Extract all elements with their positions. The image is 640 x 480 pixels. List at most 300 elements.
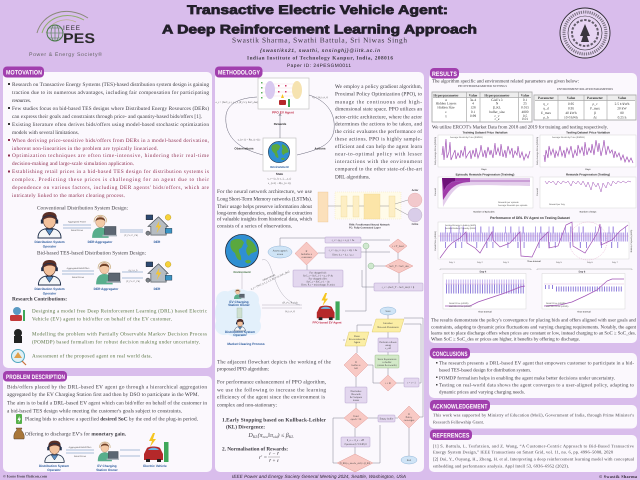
chart: training price: Average Electricity Price ($/MWh) — [450, 136, 483, 139]
text: results discussion: constraints, adapting to dynamic price fluctuations and varying charging requirements. Notably, the agent — [431, 324, 637, 330]
cloud: market clearing — [215, 289, 261, 337]
bullet list: conclusions: based TES-based design for distribution system. — [439, 367, 531, 373]
chart: day 6: Day 6 — [579, 270, 586, 274]
text: LSTM description: For the neural network architecture, we use — [217, 189, 313, 195]
box: SoC update: For charged offer: — [309, 278, 328, 280]
text: PPO description: near-to-optimal policy with lesser — [335, 152, 422, 158]
bullet list: motivation: complex. Predicting these prices is challenging for an agent due to their — [12, 177, 209, 183]
heading: research contributions: Research Contributions: — [12, 296, 67, 302]
text: references: Energy System Design,” IEEE Transactions on Smart Grid, vol. 11, no. 6, pp. 4996–5008, 2020 — [433, 449, 613, 454]
bullet list: motivation: intricately linked to the market clearing process. — [12, 193, 125, 199]
observations formula: o_t = {SoC_t, t_i, t_f, (P_t^c), SoC_des} — [250, 270, 291, 291]
end: End — [407, 459, 412, 462]
bullet list: conclusions: Testing on real-world data shows the agent converges to a user-aligned policy, adapting to — [439, 382, 635, 388]
update networks: Optimize (L^CLIP) θ — [344, 443, 367, 446]
table: environment: ρ_c — [592, 102, 598, 106]
table: hyperparameters: γ — [445, 114, 447, 118]
title: Transactive Electric Vehicle Agent: — [187, 3, 448, 17]
panel: methodology — [215, 66, 424, 472]
text: early stopping: 1.Early Stopping based on Kullback-Leibler — [222, 418, 327, 424]
table: hyperparameters: Value — [469, 93, 478, 97]
heading: motivation — [3, 66, 44, 78]
action formula: a_t = (q_t, p_t) — [312, 96, 328, 99]
store experiences: in buffer — [383, 361, 392, 364]
label: rewards: Rewards — [274, 122, 287, 126]
text: PPO description: actor-critic architecture, where the actor — [335, 114, 422, 120]
table: environment: Parameter — [587, 96, 603, 100]
chart: performance on testing: Performance of DRL EV Agent on Testing Dataset — [490, 216, 571, 220]
chart: performance on testing: Day 6 — [587, 261, 593, 264]
text: normalisation: r − r̄ — [269, 451, 280, 457]
table: environment: 0.25 h — [618, 115, 627, 119]
diagram: hierarchy: Distribution System — [39, 464, 69, 468]
text: LSTM description: Their usage helps preserve information about — [217, 204, 313, 210]
diagram: hierarchy: Retail Prices — [74, 455, 87, 458]
KL check: D_KL(π_new‖π_old) ≥ β_KL — [340, 462, 371, 465]
done check: full — [354, 367, 358, 370]
text: performance enhancement — [217, 380, 326, 408]
text: references — [433, 443, 635, 468]
table: hyperparameters — [432, 92, 532, 122]
diagram: hierarchy: Electric Vehicle — [143, 464, 167, 468]
cloud: market clearing: Station Owner — [228, 303, 251, 307]
text: references: [2] Dai, Y., Ouyang, H., Zheng, H. et al. Interpreting a deep reinforcement learning model with conceptual — [433, 456, 635, 461]
table: environment: E_max — [541, 111, 551, 115]
bullet list: motivation — [8, 82, 210, 199]
text: PPO description: these actions. PPO is highly sample- — [335, 136, 422, 142]
normalize: Normalize — [351, 390, 362, 393]
goal: monetary gain: Offering to discharge EV's for monetary gain. — [25, 432, 127, 438]
panel: problem description — [3, 371, 212, 472]
chart: testing price — [536, 130, 636, 171]
text: early stopping: KL — [288, 434, 294, 439]
chart: episodic rewards: Reward — [434, 187, 437, 196]
text: acknowledgement: Research Fellowship Grant. — [433, 419, 484, 424]
diamond: desired SoC — [385, 259, 413, 273]
label: observations: Observations — [234, 146, 254, 150]
text: normalisation — [222, 446, 288, 464]
chart: episodic rewards: Number of Episodes — [473, 210, 495, 214]
caption: table 1: PPO HYPERPARAMETER SETTINGS — [458, 84, 507, 88]
bullet list: motivation: resources. — [12, 98, 31, 104]
time check — [380, 375, 396, 391]
logo: IEEE PES: IEEE — [63, 25, 81, 32]
bullet list: conclusions: POMDP formalism helps in enabling the agent make better decisions under uncertainty. — [439, 375, 615, 381]
panel: references — [429, 430, 637, 472]
box: SoC update: Here, P_t = min(charge, P_min) — [301, 284, 335, 286]
diagram: PPO agent loop — [216, 78, 334, 185]
observations formula: Observations — [262, 273, 276, 282]
converge check — [398, 406, 420, 428]
arrow: actions — [297, 95, 334, 155]
table: hyperparameters: buffer_size — [489, 110, 505, 114]
label: PPO EV Agent: PPO EV Agent — [272, 110, 295, 114]
text: PPO description: determines the actions to be taken, and — [335, 122, 422, 128]
chart: testing price: Testing Dataset Price Variation — [566, 130, 610, 134]
observation formula: o_t = {SoC_t, t_i, t_f, (P_t^c), SoC_des} — [216, 101, 259, 104]
chart: training price: Days — [481, 168, 487, 171]
chart: performance on testing: Retail Price (c/kWh) — [434, 231, 437, 251]
chart: training price: Daily Average Price ($/MWh) — [434, 137, 437, 165]
chart: episodic rewards: Average Rewards per episode — [498, 204, 528, 207]
diamond: desired SoC: SoC_T < SoC_des — [389, 265, 409, 268]
text: early stopping: new — [263, 435, 269, 439]
diagram: hierarchy: Station Owner — [96, 468, 119, 472]
diamond: final time — [389, 239, 407, 253]
chart: episodic rewards: Episodic Rewards Progression (Training) — [456, 172, 514, 176]
diagram: bid-based design: Aggregated Bids/Offers — [67, 267, 90, 270]
table: hyperparameters: c_e — [495, 117, 500, 121]
table: hyperparameters: 3e-4 — [470, 98, 476, 102]
diamond: final time: t ≤ T_final — [392, 245, 404, 248]
logo: IEEE PES: PES — [63, 30, 95, 46]
label: market clearing process: Market Clearing Process — [227, 342, 265, 346]
credit: icons: © Icons from flaticon.com — [3, 474, 48, 478]
table: hyperparameters: 4 — [472, 102, 474, 106]
text: acknowledgement: This work was supported by Ministry of Education (MoE), Government of India, through Prime Minister's — [433, 412, 634, 417]
store experiences: Store Experiences — [378, 358, 396, 361]
contribution 2: (POMDP) based formalism for robust decision making under uncertainty. — [32, 340, 200, 346]
initialise — [372, 319, 404, 332]
update buffer — [378, 415, 395, 422]
table: environment: η_c — [543, 102, 549, 106]
end — [401, 456, 417, 464]
done check: If — [355, 361, 357, 364]
contribution 1: Vehicle (EV) agent to bid/offer on behalf of the EV customer. — [32, 316, 172, 322]
text: PPO description: interactions with the environment — [335, 159, 423, 165]
body text: Bids/offers placed by the DRL-based EV agent go through a hierarchical aggregation — [7, 384, 207, 390]
diagram: conventional design: DER — [154, 240, 161, 244]
flowchart: PPO algorithm — [333, 307, 423, 472]
heading: results: RESULTS — [432, 71, 458, 78]
text: PPO description — [335, 84, 423, 180]
box: reward 1 — [325, 237, 361, 243]
table: environment: 0.95 — [568, 106, 574, 110]
table: hyperparameters: N — [496, 102, 499, 106]
panel: conclusions — [429, 348, 637, 398]
text: PPO description: compared to the other state-of-the-art — [335, 167, 423, 173]
table: hyperparameters: 25 — [523, 102, 527, 106]
chart: performance on testing — [434, 216, 633, 264]
emails: {swastiks21, swathi, snsinghj}@iitk.ac.in — [260, 48, 380, 54]
table: hyperparameters: 0.1 — [523, 98, 527, 102]
state formula — [268, 172, 292, 185]
box: reward 2: r_t = -(p_t + (a_t + d)) × Δt — [329, 249, 357, 252]
transition formula: s_{t+1} ~ P(s_{t+1}) — [238, 138, 260, 142]
text: ercot: We utilize ERCOT's Market Data from 2018 and 2019 for training and testing respectively. — [432, 124, 608, 130]
KL check — [337, 454, 373, 472]
authors: Swastik Sharma, Swathi Battula, Sri Niwas Singh — [232, 36, 407, 44]
chart: performance on testing: Day 7 — [612, 261, 618, 264]
diagram: bid-based design: Operator — [43, 292, 57, 296]
body text: a bid-based TES design while meeting the customer's goals subject to constraints. — [7, 408, 182, 414]
bullet list: motivation: models with several limitations. — [12, 130, 79, 136]
reset environment: Agent — [354, 341, 360, 344]
increment — [404, 378, 419, 387]
body text — [7, 384, 207, 414]
diamond: constraint — [295, 242, 318, 265]
cloud: market clearing: EV Charging — [229, 300, 249, 304]
bullet list: conclusions: dynamic prices and varying charging needs. — [439, 389, 525, 395]
chart: testing price: Average Electricity Price ($/MWh) — [552, 136, 585, 139]
text: performance enhancement: efficiency of the agent since the environment is — [217, 394, 325, 400]
heading: references: REFERENCES — [432, 432, 470, 440]
label: EV agent: PPO-based EV Agent — [313, 320, 342, 324]
logo: IEEE PES: Power & Energy Society® — [29, 52, 102, 58]
bullet list: motivation: Optimization techniques are often time-intensive, hindering their real-time — [12, 153, 210, 159]
box: terminal reward: r_t = -(SoC_T − SoC_des)² × β — [382, 286, 415, 289]
box: terminal reward — [374, 283, 423, 291]
table: hyperparameters: β_KL — [493, 106, 501, 110]
text: PPO description: efficient and can help the agent learn — [335, 144, 422, 150]
text: PPO description: manage the continuous and high- — [335, 99, 422, 105]
box: SoC update: SoC_t = SoC_t-1 − Δt — [306, 280, 330, 284]
table: environment: Value — [618, 96, 627, 100]
chart: performance on testing: Day 5 — [556, 261, 562, 264]
ellipse: assess action: action — [277, 253, 284, 256]
text: results discussion: When SoC ≥ SoC_des or prices are higher, it benefits by offering to discharge. — [431, 336, 580, 342]
text: early stopping: (π — [258, 432, 264, 439]
subheading: bid-based design: Bid-based TES-based Distribution System Design: — [37, 250, 147, 256]
text: performance enhancement: complex and non-stationary: — [217, 402, 278, 408]
time check: t ≤ B — [385, 382, 391, 385]
body text: The aim is to build a DRL-based EV agent which can bid/offer on behalf of the customer in — [7, 400, 207, 406]
contribution 1: Designing a model free Deep Reinforcement Learning (DRL) based Electric — [32, 308, 208, 314]
table: hyperparameters: 0.01 — [522, 117, 528, 121]
PPO network box — [258, 78, 309, 109]
bullet list: conclusions — [436, 360, 635, 395]
table: hyperparameters: 0.5 — [523, 114, 527, 118]
title: A Deep Reinforcement Learning Approach — [162, 22, 477, 36]
text: results discussion — [431, 317, 637, 342]
diagram: LSTM network — [318, 189, 422, 230]
state formula: s_t = {o_0, o_1,...,o_t} — [268, 178, 292, 180]
bullet list: motivation: When deriving price-sensitive bids/offers from DERs in a model-based derivation, — [12, 138, 209, 144]
chart: testing price: Days — [585, 168, 591, 171]
diagram: bid-based design: (q_t, p_t) — [129, 269, 138, 272]
diagram: bid-based design: DER Aggregator — [94, 287, 119, 291]
paper id: Paper ID: 24PESGM0011 — [287, 63, 351, 69]
goal: desired SoC — [16, 414, 198, 424]
chart: performance on testing: Day 3 — [503, 261, 509, 264]
bullet list: motivation: traction due to its numerous advantages, including fair compensation for participating — [12, 90, 209, 96]
chart: day 6: Bid/Offer Price (c/kWh) — [546, 305, 569, 308]
text: early stopping: ‖π — [268, 432, 274, 439]
normalize — [345, 387, 367, 403]
logo: IEEE PES — [29, 11, 102, 58]
chart: episodic rewards — [434, 172, 533, 214]
text: flowchart description: proposed PPO algorithm: — [217, 366, 270, 372]
diagram: bid-based design: Retail Prices — [72, 276, 85, 279]
epoch check: epoch = K — [351, 418, 362, 421]
table: hyperparameters: Hidden Layers — [436, 102, 457, 106]
bullet list: motivation: inherent non-linearities in the problem are typically linearized. — [12, 146, 158, 152]
junction circles — [363, 243, 374, 269]
bullet list: motivation: can express their goals and constraints through price- and quantity-based bids/offers [1]. — [12, 114, 202, 120]
ellipse: assess action — [268, 246, 292, 258]
contribution 1 — [10, 307, 208, 322]
table: environment: Parameter — [538, 96, 554, 100]
diagram: conventional design: (P_t^c, P_t^d) — [124, 234, 138, 237]
update buffer: Empty buffer — [380, 418, 394, 420]
panel: results — [429, 68, 637, 343]
chart: training price: Training Dataset Price Variation — [462, 130, 508, 134]
contribution 3 — [12, 350, 152, 365]
start: Start — [386, 310, 391, 313]
increment: t = t + 1 — [407, 382, 416, 384]
table: environment: Value — [567, 96, 576, 100]
chart: performance on testing: Day 1 — [449, 261, 455, 264]
reset environment: Reset — [354, 335, 360, 338]
diagram: bid-based design: DER — [154, 287, 161, 291]
affiliation: Indian Institute of Technology Kanpur, India, 208016 — [247, 55, 393, 61]
contribution 2 — [14, 329, 207, 346]
converge check: converges — [404, 419, 414, 422]
bullet list: conclusions: The research presents a DRL-based EV agent that empowers customer to participate in a bid- — [439, 360, 634, 366]
diagram: bid-based design — [34, 260, 172, 296]
diagram: LSTM network: Critic — [412, 223, 419, 226]
chart: day 4 — [443, 270, 526, 314]
heading: conclusions: CONCLUSIONS — [432, 351, 468, 358]
diagram: hierarchy: Aggregated Bids/Offers — [69, 446, 92, 449]
panel: motivation — [3, 66, 212, 368]
rollouts: Perform rollouts — [379, 341, 397, 344]
normalize: & Compute — [350, 396, 363, 399]
bullet list: motivation: decision-making and large-scale simulation application. — [12, 161, 134, 167]
table: hyperparameters: GAE's λ — [491, 98, 503, 102]
text: results discussion: The results demonstrate the policy's convergence for placing bids and offers aligned with user goals and — [431, 317, 637, 323]
reset environment: Environment & — [349, 338, 365, 341]
table: hyperparameters: Value — [521, 93, 530, 97]
text: PPO description: DRL algorithms. — [335, 174, 370, 180]
logo: IIT Kanpur — [560, 8, 610, 58]
heading: methodology: METHODOLOGY — [218, 70, 261, 76]
panel: acknowledgement — [429, 400, 637, 428]
label: environment: Environment — [233, 270, 251, 274]
text: early stopping — [222, 418, 327, 439]
environment box: Environment — [270, 165, 289, 169]
text: intro: The algorithm specific and environment related parameters are given below: — [432, 78, 579, 84]
state formula: s_{t+1} ~ P(o_{t+1}) — [268, 182, 291, 185]
done check — [344, 353, 368, 377]
text: performance enhancement: For performance enhancement of PPO algorithm, — [217, 380, 326, 386]
bullet list: motivation: Existing literature often derives bids/offers using model-based stochastic optimization — [12, 122, 209, 128]
table: hyperparameters: Hyperparameter — [484, 93, 510, 97]
rollouts: using — [385, 344, 392, 347]
prices labels: (P_t^c, P_t^d) — [283, 302, 298, 304]
heading: problem description — [3, 371, 67, 382]
text: early stopping: KL — [252, 434, 258, 439]
diagram: conventional design: Distribution System — [34, 240, 65, 244]
converge check: If — [408, 413, 410, 416]
diagram: LSTM network: Actor — [412, 189, 418, 192]
rollouts: π_old — [385, 347, 392, 350]
chart: day 4: Retail Price (c/kWh) — [449, 302, 469, 305]
chart: performance on testing: Day 2 — [477, 261, 483, 264]
chart: day 4: Time Interval — [478, 310, 492, 314]
table: environment: 2.5 ¢/kWh — [615, 102, 630, 106]
text: early stopping: ) ≤ β — [276, 432, 289, 439]
table: environment: 10 ¢/kWh — [564, 115, 578, 119]
table: hyperparameters: Hyperparameter — [433, 93, 459, 97]
box: SoC update: For charged bid: — [309, 272, 327, 274]
text: flowchart description: The adjacent flowchart depicts the working of the — [217, 360, 332, 366]
epoch check — [344, 408, 368, 428]
table: environment: η_d — [543, 106, 549, 110]
text: normalisation: r′ = — [259, 455, 267, 461]
text: LSTM description: consists of a series of observations. — [217, 223, 292, 229]
goal: desired SoC: Placing bids to achieve a specified desired SoC by the end of the plug-in period. — [25, 416, 198, 422]
reset environment — [345, 332, 369, 346]
chart: day 6: Retail Price (c/kWh) — [546, 302, 566, 305]
table: environment: 40 kWh — [565, 111, 577, 115]
box: reward 2: Here, d_t = k_t / p_t — [332, 254, 354, 256]
done check: buffer is — [352, 364, 360, 367]
text: LSTM description: Long Short-Term Memory networks (LSTMs). — [217, 196, 312, 202]
day brackets — [440, 269, 632, 270]
table: hyperparameters: 0.1 — [471, 110, 475, 114]
chart: performance on testing: Time Interval — [527, 260, 541, 263]
heading: acknowledgement — [430, 400, 490, 411]
table: environment: 80 — [620, 111, 624, 115]
diagram: hierarchy: EV Charging — [97, 464, 117, 468]
table: hyperparameters: 0.015 — [521, 106, 529, 110]
text: performance enhancement: we use the following to increase the learning — [217, 388, 326, 394]
diamond: constraint: constraint — [301, 256, 312, 259]
bullet list: motivation: Research on Transactive Energy Systems (TES)-based distribution system design is gaining — [12, 82, 209, 88]
heading: acknowledgement: ACKNOWLEDGEMENT — [432, 403, 488, 410]
chart: performance on testing: Battery Capacity (kWh) — [630, 229, 633, 252]
diagram: conventional design — [34, 212, 172, 248]
text: flowchart description — [217, 360, 332, 372]
title — [162, 3, 477, 36]
ellipse: assess action: Assess agent's — [273, 250, 287, 252]
box: reward 2 — [325, 247, 361, 258]
bullet list: motivation: Few studies focus on bid-based TES designs where Distributed Energy Resources (DERs) — [12, 106, 209, 112]
diagram: LSTM network: FNN: Feedforward Neural Network — [349, 224, 390, 226]
table: hyperparameters: 4800 — [522, 110, 529, 114]
contribution 3: Assessment of the proposed agent on real world data. — [32, 354, 152, 360]
store experiences — [375, 355, 399, 368]
table: hyperparameters: c_v — [494, 114, 500, 118]
table: environment: 0.95 — [568, 102, 574, 106]
table: hyperparameters: Hidden Size — [437, 106, 455, 110]
caption: table 2: ENVIRONMENT RELATED PARAMETERS — [557, 87, 613, 91]
chart: daily rewards — [536, 172, 636, 214]
text: early stopping: old — [273, 435, 278, 439]
table: environment: ρ_b — [543, 115, 549, 119]
chart: daily rewards: Number of Days — [580, 210, 597, 214]
chart: day 4: Bid/Offer Price (c/kWh) — [449, 305, 472, 308]
chart: day 6: Time Interval — [577, 310, 591, 314]
diagram: conventional design: Aggregated Power — [68, 220, 86, 224]
table: environment: P_max — [590, 106, 600, 110]
diagram: hierarchy — [39, 433, 168, 472]
state formula: State — [276, 172, 283, 176]
table: hyperparameters: 0.99 — [470, 114, 476, 118]
chart: performance on testing: Desired Battery Capacity (kWh) — [445, 227, 476, 230]
text: normalisation: r̄ + ε — [269, 458, 279, 464]
heading: conclusions — [430, 348, 470, 358]
connections — [242, 260, 302, 308]
chart: day 6 — [542, 270, 625, 314]
diamond: constraint: If — [306, 250, 307, 253]
copyright: © Swastik Sharma — [599, 474, 638, 479]
update networks — [341, 437, 370, 447]
diagram: hierarchy: Operator — [47, 468, 61, 472]
epoch check: Until — [353, 415, 359, 418]
chart: episodic rewards: Rewards per episode — [498, 201, 519, 204]
